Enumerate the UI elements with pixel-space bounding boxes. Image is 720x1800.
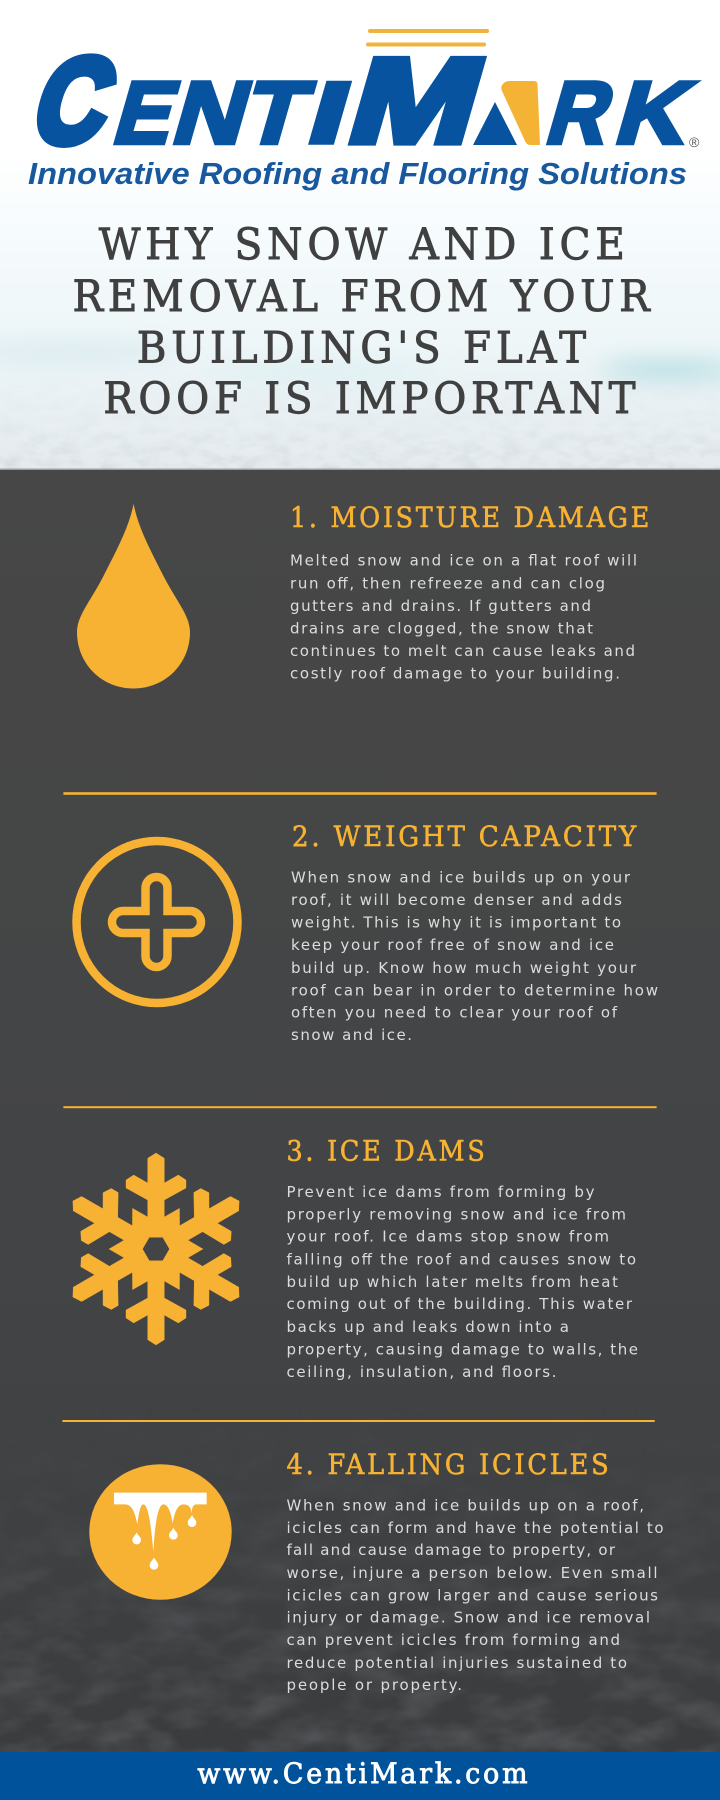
icon: water drop xyxy=(77,504,190,688)
section 3: ice dams xyxy=(58,1135,638,1381)
body text: run off, then refreeze and can clog xyxy=(290,574,605,592)
section 1: moisture damage xyxy=(77,501,652,688)
logo: CentiMark xyxy=(21,29,704,191)
body text: icicles can grow larger and cause serious xyxy=(286,1586,658,1604)
logo wordmark: R xyxy=(537,64,625,162)
body text: weight. This is why it is important to xyxy=(291,914,621,932)
heading: 4. FALLING ICICLES xyxy=(286,1448,612,1481)
body text xyxy=(291,868,658,1044)
body text: build up which later melts from heat xyxy=(286,1273,618,1291)
tagline: Innovative Roofing and Flooring Solutions xyxy=(28,156,687,191)
body text xyxy=(290,552,637,683)
body text: keep your roof free of snow and ice xyxy=(291,936,614,954)
logo wordmark: I xyxy=(296,64,364,162)
body text: When snow and ice builds up on a roof, xyxy=(286,1496,644,1514)
heading: 2. WEIGHT CAPACITY xyxy=(292,820,639,853)
body text xyxy=(286,1183,638,1381)
registered mark: ® xyxy=(689,134,700,150)
body text: roof can bear in order to determine how xyxy=(291,982,658,1000)
body text: ceiling, insulation, and floors. xyxy=(286,1363,556,1381)
header background: snow photo xyxy=(0,227,720,470)
body text: fall and cause damage to property, or xyxy=(286,1541,616,1559)
logo wordmark: M xyxy=(336,34,499,168)
body text: Prevent ice dams from forming by xyxy=(286,1183,595,1201)
body text: coming out of the building. This water xyxy=(286,1295,633,1313)
roof lines above the M xyxy=(366,29,489,46)
body text: often you need to clear your roof of xyxy=(291,1004,618,1022)
title: BUILDING'S FLAT xyxy=(137,324,591,374)
body text: When snow and ice builds up on your xyxy=(291,868,631,886)
body text: reduce potential injuries sustained to xyxy=(286,1654,627,1672)
body text: backs up and leaks down into a xyxy=(286,1318,569,1336)
body text: icicles can form and have the potential to xyxy=(286,1519,664,1537)
logo wordmark: C xyxy=(21,33,130,167)
icon: snowflake xyxy=(58,1153,254,1345)
title: WHY SNOW AND ICE xyxy=(99,220,630,270)
heading: 3. ICE DAMS xyxy=(286,1135,488,1168)
body text: properly removing snow and ice from xyxy=(286,1206,626,1224)
section 2: weight capacity xyxy=(76,820,658,1044)
body text: snow and ice. xyxy=(291,1026,412,1044)
title: REMOVAL FROM YOUR xyxy=(72,272,654,322)
divider 2 xyxy=(63,1106,657,1108)
body text: falling off the roof and causes snow to xyxy=(286,1250,636,1268)
logo wordmark: N xyxy=(163,64,262,162)
logo wordmark: T xyxy=(235,63,322,162)
divider 3 xyxy=(62,1420,655,1422)
title xyxy=(72,220,654,424)
body text: continues to melt can cause leaks and xyxy=(290,642,635,660)
dark content panel background xyxy=(0,470,720,1752)
body text: drains are clogged, the snow that xyxy=(290,619,593,637)
body text: worse, injure a person below. Even small xyxy=(286,1564,658,1582)
body text xyxy=(286,1496,664,1694)
body text: Melted snow and ice on a flat roof will xyxy=(290,552,637,570)
body text: can prevent icicles from forming and xyxy=(286,1631,620,1649)
body text: your roof. Ice dams stop snow from xyxy=(286,1228,609,1246)
footer bar xyxy=(0,1752,720,1800)
body text: gutters and drains. If gutters and xyxy=(290,597,591,615)
divider 1 xyxy=(63,792,657,795)
icon: icicles in circle xyxy=(89,1464,232,1600)
icon: circled plus xyxy=(76,841,238,1003)
footer website: www.CentiMark.com xyxy=(197,1757,530,1790)
body text: injury or damage. Snow and ice removal xyxy=(286,1609,650,1627)
logo wordmark: E xyxy=(105,63,190,162)
body text: costly roof damage to your building. xyxy=(290,665,620,683)
body text: roof, it will become denser and adds xyxy=(291,891,622,909)
body text: property, causing damage to walls, the xyxy=(286,1340,638,1358)
logo wordmark: K xyxy=(607,63,704,162)
title: ROOF IS IMPORTANT xyxy=(103,374,640,424)
body text: build up. Know how much weight your xyxy=(291,959,637,977)
body text: people or property. xyxy=(286,1676,462,1694)
logo A: roof triangle and gold slope xyxy=(473,81,540,145)
heading: 1. MOISTURE DAMAGE xyxy=(290,501,652,534)
section 4: falling icicles xyxy=(89,1448,664,1694)
logo wordmark xyxy=(21,33,704,168)
